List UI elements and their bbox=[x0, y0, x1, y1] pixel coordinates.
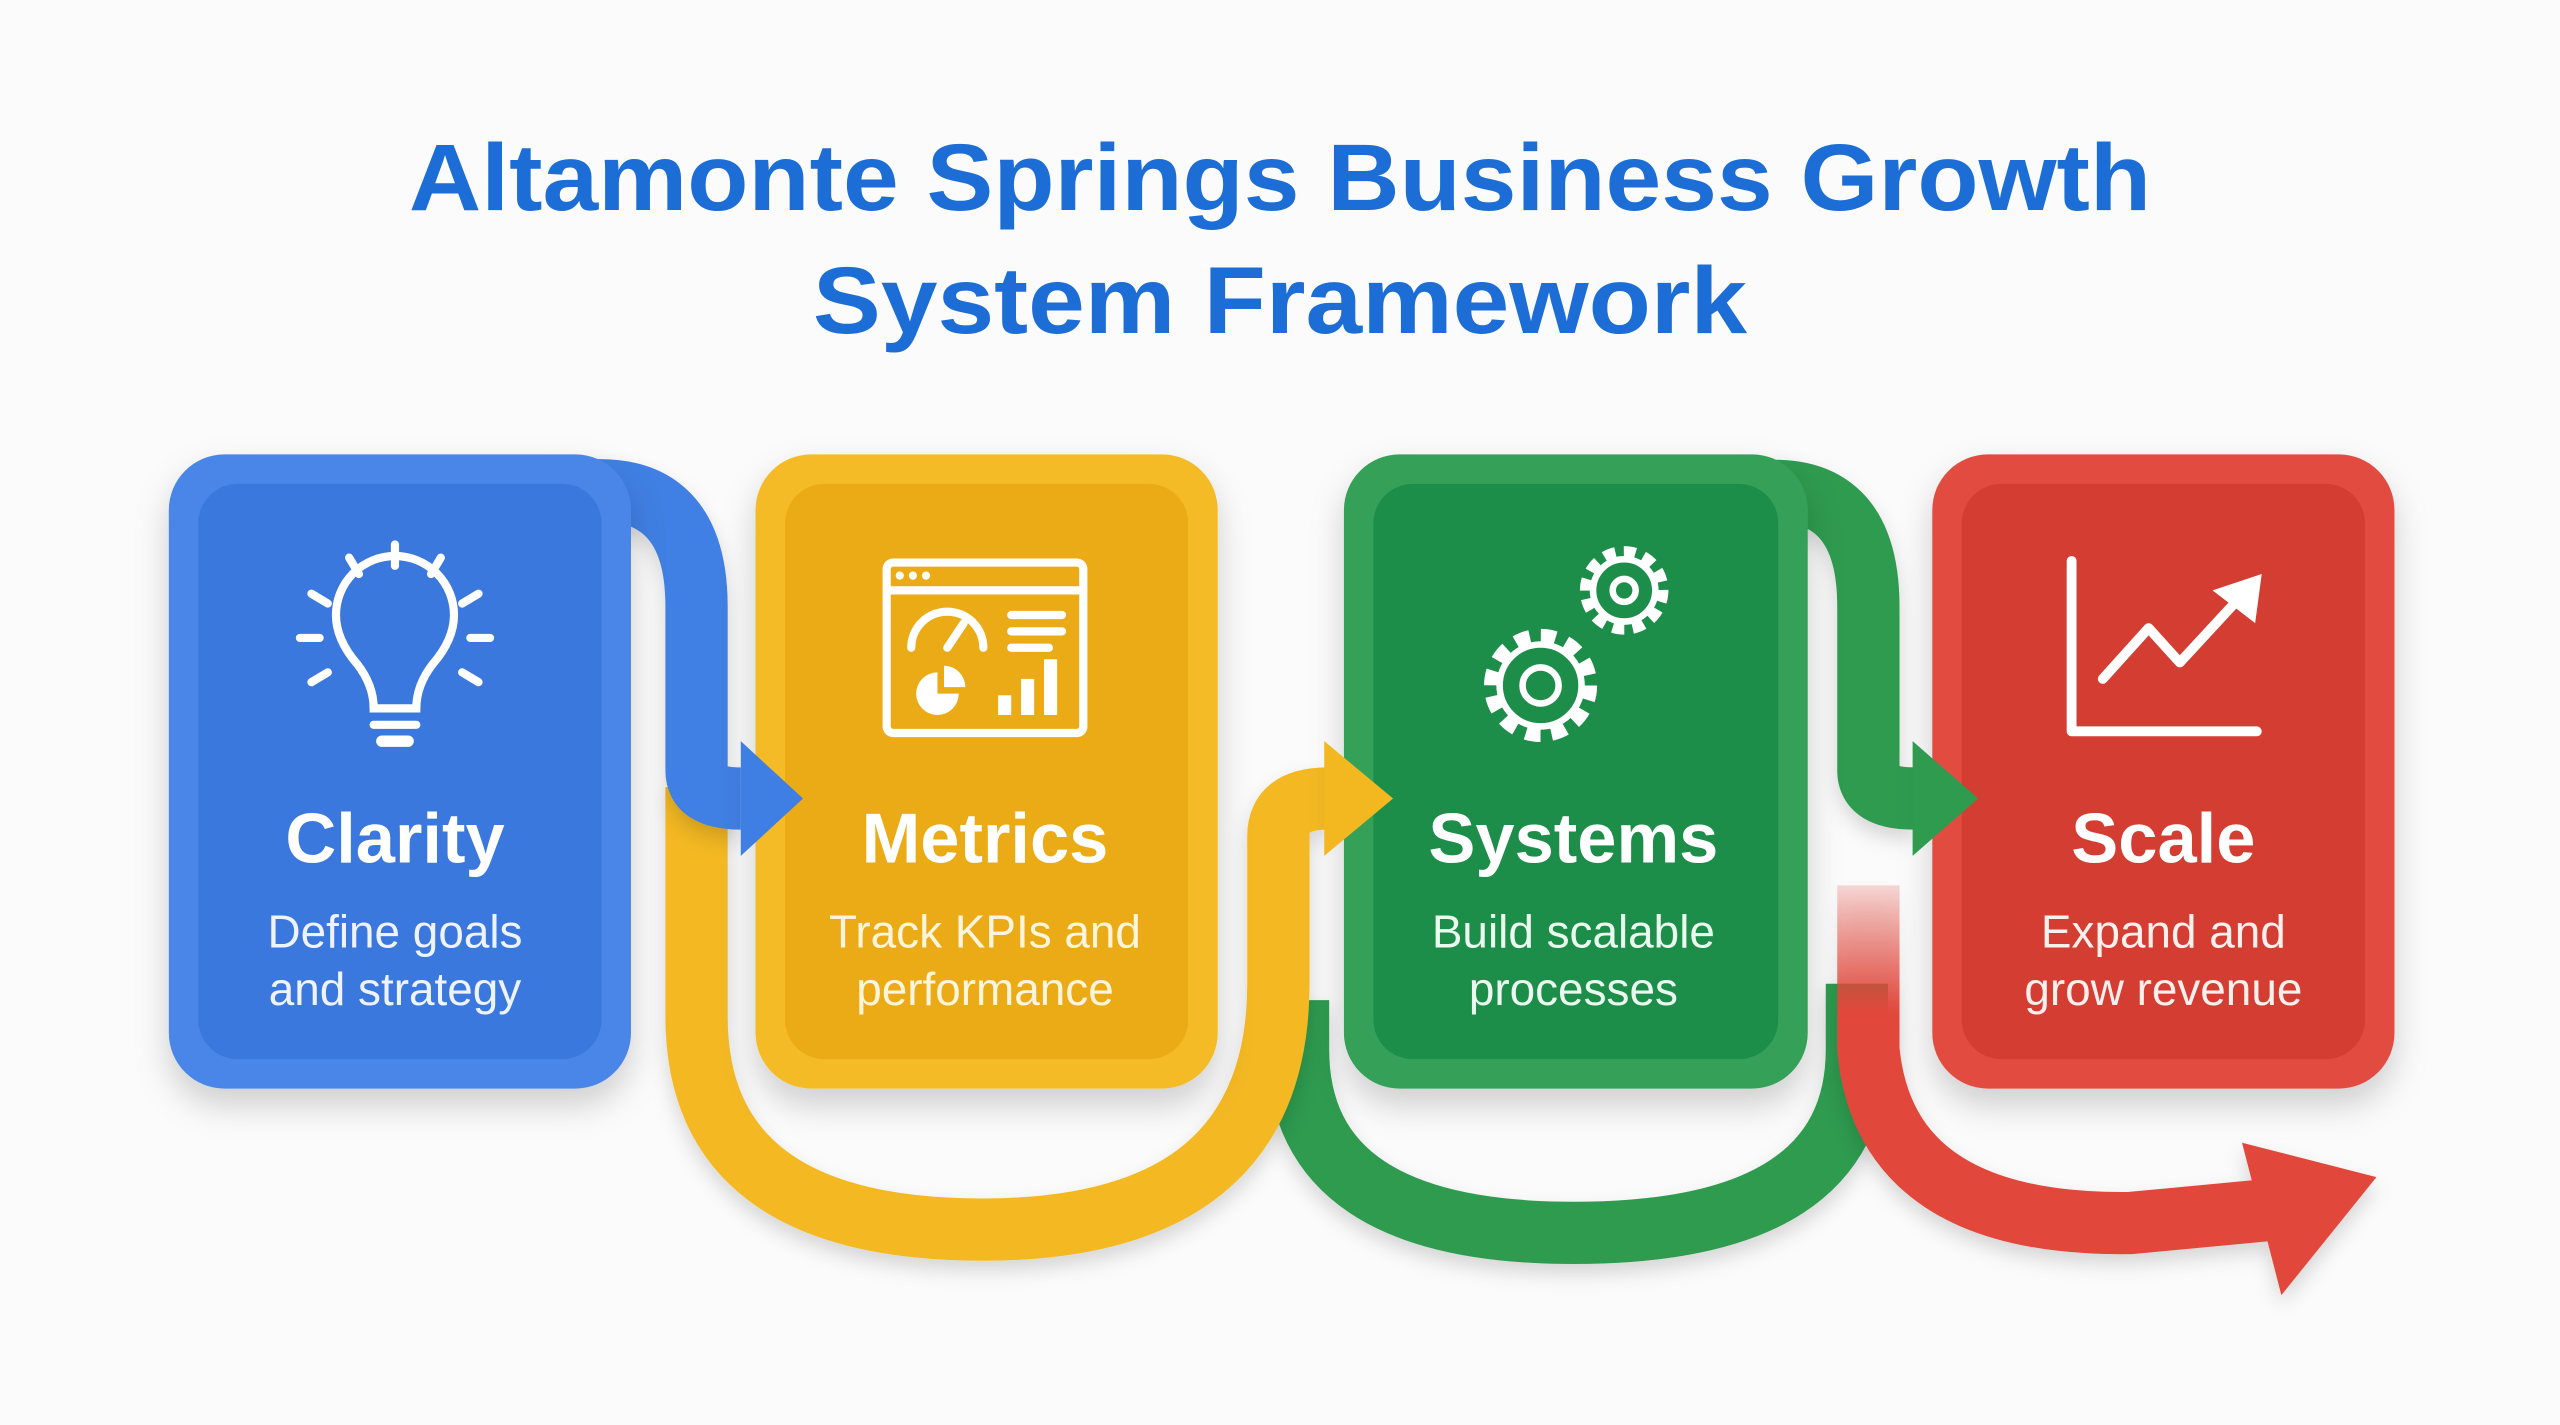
title: System Framework bbox=[813, 248, 1747, 354]
heading: Scale: Scale bbox=[2071, 798, 2255, 877]
icon: lightbulb bbox=[300, 545, 490, 741]
icon: growth chart bbox=[2072, 561, 2257, 731]
text: scale desc: grow revenue bbox=[2024, 963, 2302, 1015]
icon: dashboard bbox=[887, 563, 1083, 733]
text: metrics desc: performance bbox=[856, 963, 1114, 1015]
icon: gears bbox=[1491, 553, 1662, 735]
card: systems bbox=[1344, 454, 1808, 1089]
connector: yellow loop bbox=[697, 787, 1328, 1230]
heading: Systems: Systems bbox=[1428, 798, 1718, 877]
text: systems desc: Build scalable bbox=[1432, 906, 1715, 958]
heading: Clarity: Clarity bbox=[285, 798, 505, 877]
connector: red arrow bbox=[1868, 885, 2376, 1295]
text: clarity desc: Define goals bbox=[267, 906, 522, 958]
text: scale desc: Expand and bbox=[2041, 906, 2286, 958]
title bbox=[409, 125, 2151, 354]
title: Altamonte Springs Business Growth bbox=[409, 125, 2151, 231]
card: metrics bbox=[756, 454, 1218, 1089]
text: metrics desc: Track KPIs and bbox=[829, 906, 1141, 958]
connector: green arrow bbox=[1754, 491, 1914, 799]
heading: Metrics: Metrics bbox=[862, 798, 1108, 877]
card: scale bbox=[1932, 454, 2394, 1089]
connector: green loop under cards bbox=[1298, 984, 1857, 1233]
connector: blue arrow bbox=[574, 490, 741, 799]
text: systems desc: processes bbox=[1469, 963, 1678, 1015]
card: clarity bbox=[169, 454, 631, 1089]
arrowhead: blue bbox=[741, 741, 803, 856]
text: clarity desc: and strategy bbox=[269, 963, 521, 1015]
arrowhead: green bbox=[1913, 741, 1978, 856]
arrowhead: yellow bbox=[1324, 741, 1393, 856]
